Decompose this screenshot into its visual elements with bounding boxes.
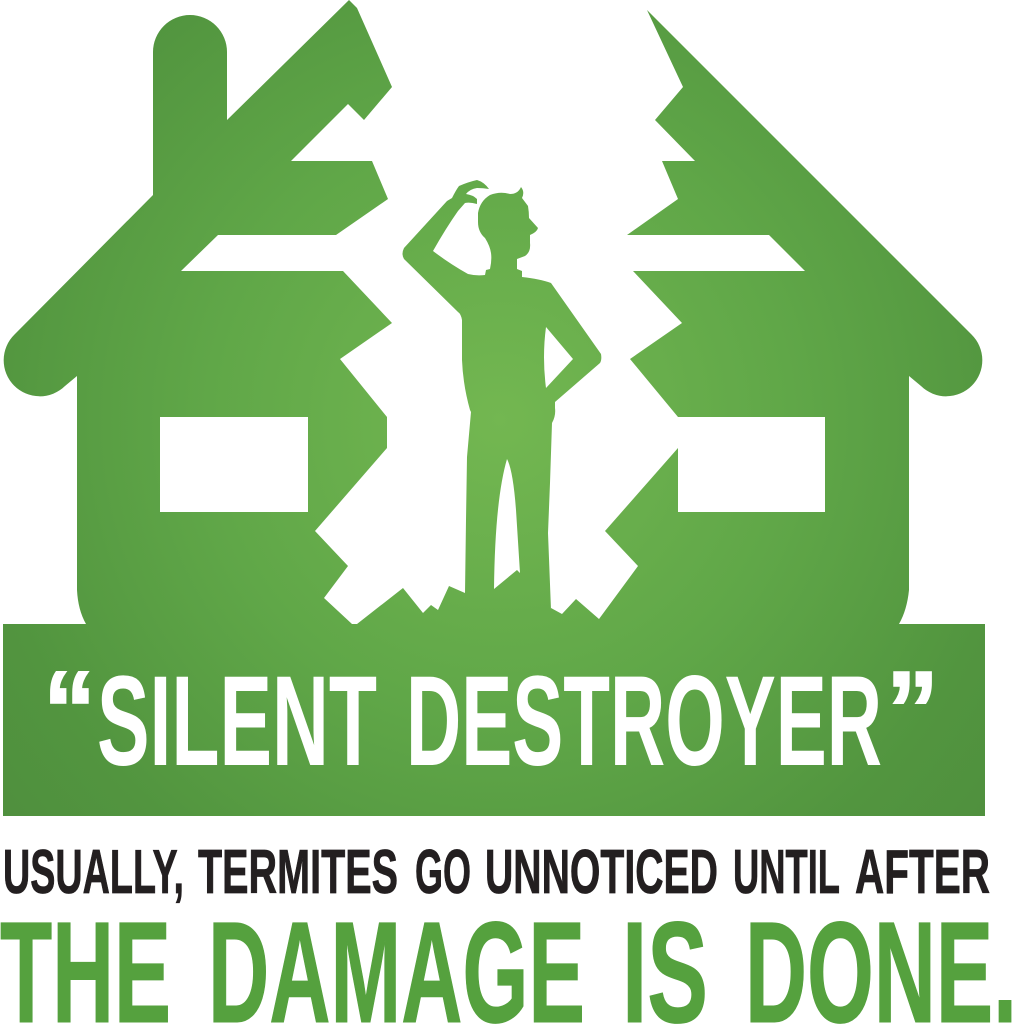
cracked house with banner base [3, 0, 985, 816]
title: silent destroyer: SILENT [97, 650, 377, 793]
title: silent destroyer: “ [43, 649, 96, 772]
subtitle: usually termites go unnoticed until after: USUALLY, [3, 838, 184, 907]
subtitle: usually termites go unnoticed until after [3, 838, 990, 907]
subtitle: usually termites go unnoticed until after: UNTIL [733, 838, 840, 907]
title: silent destroyer: ” [886, 649, 939, 772]
headline: the damage is done [0, 892, 1017, 1024]
man scratching his head [402, 180, 601, 610]
subtitle: usually termites go unnoticed until after: GO [415, 838, 471, 907]
subtitle: usually termites go unnoticed until after: UNNOTICED [485, 838, 718, 907]
title: silent destroyer [43, 649, 939, 793]
subtitle: usually termites go unnoticed until after: TERMITES [198, 838, 398, 907]
